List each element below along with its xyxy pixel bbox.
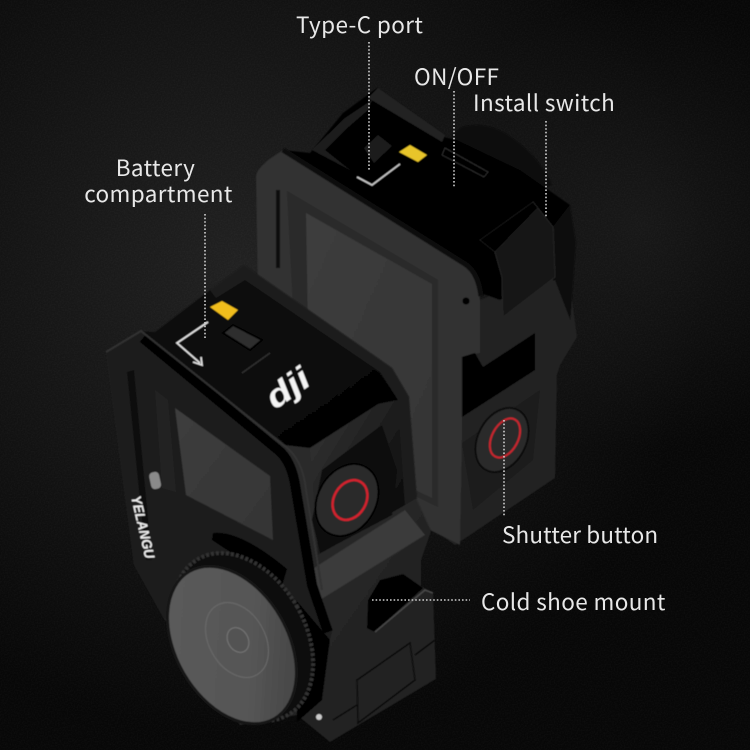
leader: Shutter button [503, 420, 505, 517]
hinge clip [495, 202, 555, 317]
foot seam [333, 640, 435, 720]
lens dial [144, 528, 342, 746]
side slot [462, 333, 535, 417]
label: Type-C port: Type-C port [296, 8, 423, 40]
leader: ON/OFF [453, 91, 455, 188]
leader: Battery compartment [204, 214, 206, 340]
screen [175, 408, 273, 540]
leader: Cold shoe mount [372, 599, 470, 601]
leader: Type-C port [368, 42, 370, 170]
screw [462, 298, 470, 304]
front frame face [106, 331, 332, 680]
right bezel [553, 205, 576, 325]
rear left gap [276, 190, 280, 268]
front camera in cage [106, 265, 436, 747]
left strip [127, 370, 152, 560]
top rim highlight [210, 265, 417, 505]
lower sheen band [303, 510, 425, 600]
rear camera in cage [256, 88, 577, 545]
arrow on rear camera [357, 164, 400, 185]
side block [462, 280, 573, 443]
side button block [310, 400, 405, 555]
lens glass [141, 543, 323, 747]
lens centre [223, 624, 253, 656]
switch line [242, 353, 270, 373]
label: ON/OFF: ON/OFF [414, 60, 499, 92]
frame corner bevel [283, 150, 481, 296]
rear lens dial [452, 125, 552, 200]
side window [155, 390, 176, 492]
dji logo: dji [258, 359, 318, 416]
slot lip [375, 590, 433, 632]
label: Cold shoe mount: Cold shoe mount [481, 585, 666, 617]
port recess [364, 135, 392, 163]
foot clip [357, 643, 415, 723]
label: Battery compartment: compartment [84, 177, 233, 209]
label: Install switch: Install switch [473, 86, 615, 118]
yellow tab [210, 301, 238, 320]
leader: Install switch [545, 121, 547, 218]
ledge [368, 88, 445, 142]
shutter button [303, 425, 397, 553]
rear screen [306, 213, 432, 498]
clip top slot [480, 202, 538, 252]
rear button panel [462, 390, 540, 510]
cold shoe slot [367, 574, 423, 632]
frame bevel [143, 338, 328, 632]
slot on top [442, 148, 488, 177]
arrow [177, 322, 208, 365]
label: Battery compartment: Battery [116, 151, 195, 183]
rear frame face [256, 150, 480, 545]
brand text: YELANGU [128, 494, 158, 561]
frame highlight [106, 331, 322, 590]
lower cage body [428, 270, 577, 545]
lens switch [223, 325, 262, 350]
rear screen bezel [287, 191, 438, 507]
screw [316, 714, 322, 720]
shutter button rear [465, 399, 539, 481]
body silhouette [106, 265, 436, 742]
lens inner ring [193, 591, 281, 689]
dark recess [212, 533, 287, 586]
status light [148, 471, 162, 490]
label: Shutter button: Shutter button [502, 518, 658, 550]
ledge shoulder [312, 100, 372, 170]
top face [141, 265, 409, 448]
dial pocket [296, 600, 330, 722]
yellow tab top [399, 145, 427, 162]
top face [256, 88, 575, 300]
